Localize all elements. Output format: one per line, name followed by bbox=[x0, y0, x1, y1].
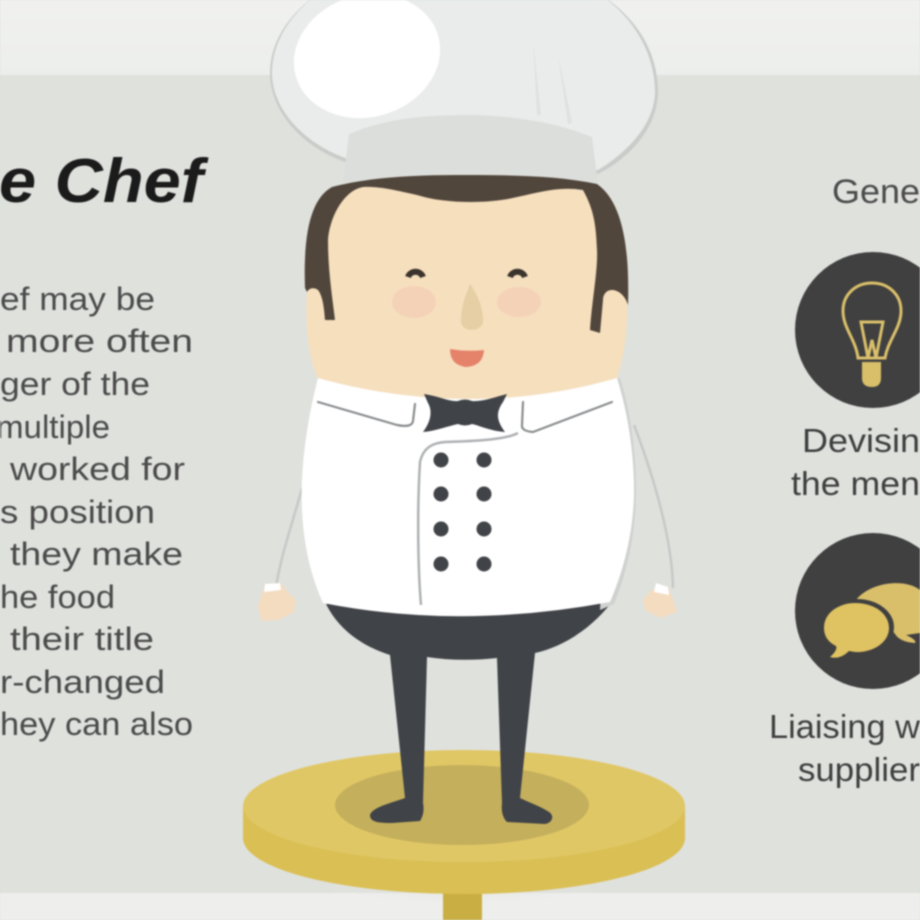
heading: e Chef bbox=[0, 147, 209, 216]
text block: chef description: r-changed bbox=[0, 664, 165, 700]
bow tie bbox=[423, 394, 507, 432]
illustration: chef on platform bbox=[243, 0, 685, 920]
text block: chef description: more often bbox=[6, 323, 193, 359]
icon: light bulb bbox=[795, 252, 920, 408]
chef jacket bbox=[302, 378, 636, 616]
text: devising the menu: Devisin bbox=[802, 422, 920, 459]
placket bbox=[418, 433, 518, 605]
eyes bbox=[408, 272, 525, 277]
text: devising the menu bbox=[791, 422, 920, 502]
hat bbox=[270, 0, 658, 183]
mouth bbox=[450, 349, 484, 367]
trousers and legs bbox=[326, 602, 612, 824]
text block: chef description: worked for bbox=[9, 451, 185, 487]
arms and hands bbox=[258, 425, 677, 621]
face bbox=[306, 180, 627, 399]
cheeks bbox=[392, 286, 436, 318]
head bbox=[305, 175, 628, 399]
platform bbox=[243, 750, 685, 920]
text block: chef description: they make bbox=[10, 536, 183, 572]
text block: chef description: ger of the bbox=[0, 366, 150, 402]
text: liaising with suppliers bbox=[769, 708, 920, 788]
hair bbox=[305, 175, 628, 333]
icon: speech bubbles bbox=[795, 533, 920, 689]
buttons bbox=[434, 452, 492, 572]
text block: chef description bbox=[0, 281, 193, 742]
column heading: Gene bbox=[832, 173, 920, 211]
text: liaising with suppliers: Liaising w bbox=[769, 708, 920, 745]
text block: chef description: hey can also bbox=[0, 706, 193, 742]
text block: chef description: s position bbox=[0, 494, 155, 530]
text: liaising with suppliers: supplier bbox=[798, 751, 920, 788]
text: devising the menu: the men bbox=[791, 465, 920, 502]
text block: chef description: ef may be bbox=[0, 281, 155, 317]
collar bbox=[318, 402, 612, 432]
nose bbox=[461, 284, 483, 330]
text block: chef description: their title bbox=[10, 621, 154, 657]
text block: chef description: he food bbox=[0, 579, 115, 615]
